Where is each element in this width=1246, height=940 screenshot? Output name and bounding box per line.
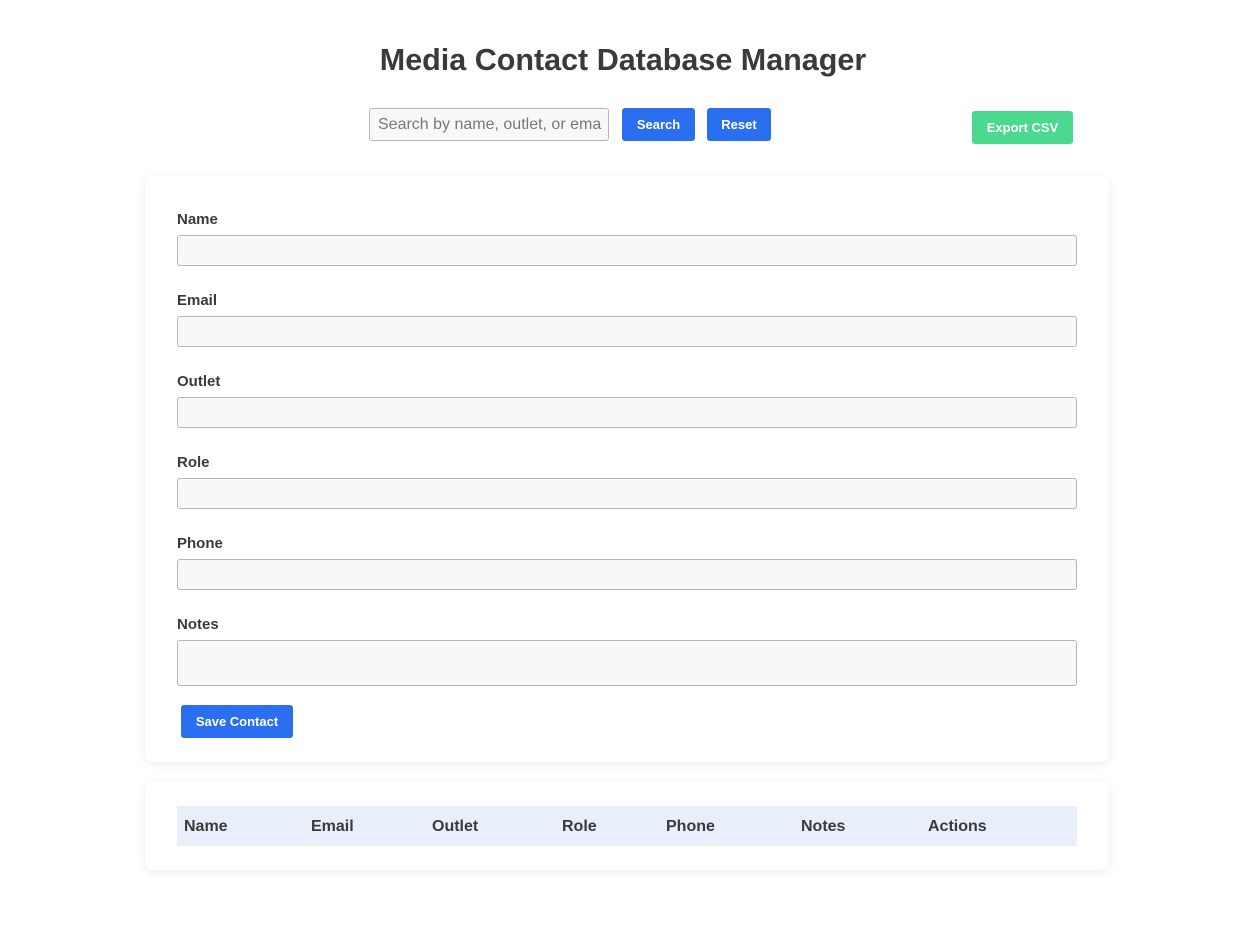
label role: Role xyxy=(177,454,210,471)
search button: Search xyxy=(637,117,680,132)
table header: Email xyxy=(311,818,354,835)
table header: Name xyxy=(184,818,228,835)
textarea notes xyxy=(177,640,1077,686)
table header: Role xyxy=(562,818,597,835)
table header: Outlet xyxy=(432,818,478,835)
title: Media Contact Database Manager xyxy=(380,43,866,77)
label phone: Phone xyxy=(177,535,223,552)
input name xyxy=(177,235,1077,266)
save button xyxy=(181,705,293,738)
table header: Notes xyxy=(801,818,845,835)
panel: contact form xyxy=(145,176,1109,762)
reset button xyxy=(707,108,771,141)
label email: Email xyxy=(177,292,217,309)
input role xyxy=(177,478,1077,509)
search input: Search by name, outlet, or ema xyxy=(378,116,601,133)
export button xyxy=(972,111,1073,144)
input email xyxy=(177,316,1077,347)
panel: contacts table xyxy=(145,782,1109,870)
input phone xyxy=(177,559,1077,590)
search button xyxy=(622,108,695,141)
input outlet xyxy=(177,397,1077,428)
export button: Export CSV xyxy=(987,120,1058,135)
label name: Name xyxy=(177,211,218,228)
label outlet: Outlet xyxy=(177,373,220,390)
table header xyxy=(177,806,1077,846)
table header: Actions xyxy=(928,818,987,835)
search input xyxy=(369,108,609,141)
reset button: Reset xyxy=(721,117,757,132)
table header: Phone xyxy=(666,818,715,835)
save button: Save Contact xyxy=(196,714,278,729)
label notes: Notes xyxy=(177,616,219,633)
